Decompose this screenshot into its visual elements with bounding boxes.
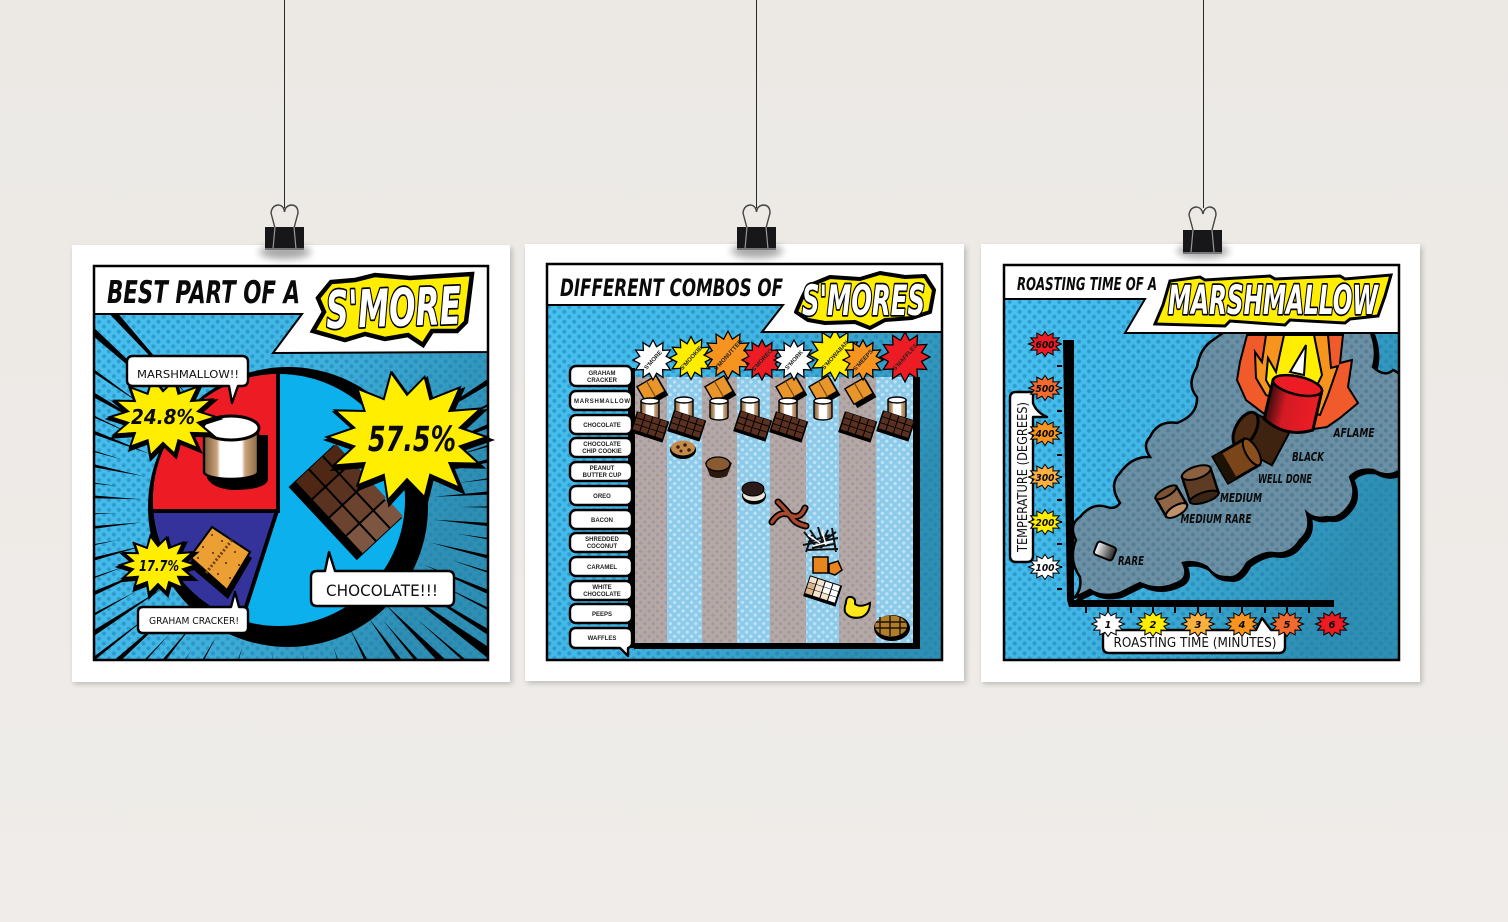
icon: peep bbox=[845, 597, 870, 618]
label: medium rare: MEDIUM RARE bbox=[1180, 511, 1252, 526]
burst: 100 bbox=[1028, 554, 1062, 580]
chocolate row bbox=[630, 410, 915, 443]
label: peeps bbox=[570, 604, 632, 623]
logo: s'more: S'MORE bbox=[325, 277, 462, 341]
marshmallow row bbox=[641, 397, 906, 420]
combo stripes bbox=[634, 377, 913, 643]
label: aflame: AFLAME bbox=[1333, 425, 1375, 440]
label: caramel bbox=[570, 557, 632, 576]
burst: s'maffles bbox=[880, 332, 930, 382]
marshmallow: medium bbox=[1180, 462, 1220, 507]
logo: s'mores: S'MORES bbox=[802, 276, 925, 325]
burst: 200 bbox=[1028, 510, 1062, 534]
bubble: marshmallow: MARSHMALLOW!! bbox=[137, 368, 239, 381]
bubble: graham cracker: GRAHAM CRACKER! bbox=[149, 616, 239, 627]
label: rare: RARE bbox=[1118, 553, 1144, 568]
burst: s'more: S'MORE bbox=[644, 350, 664, 371]
bubble: chocolate: CHOCOLATE!!! bbox=[326, 581, 438, 600]
burst: 6: 6 bbox=[1329, 620, 1336, 631]
burst: 6 bbox=[1316, 612, 1348, 636]
label: chocolate: CHOCOLATE bbox=[583, 423, 621, 429]
poster 1: best part of a s'more bbox=[71, 245, 515, 687]
label: peanut butter cup: BUTTER CUP bbox=[583, 473, 621, 479]
burst: 1: 1 bbox=[1105, 620, 1111, 631]
poster 2: different combos of s'mores bbox=[525, 244, 966, 683]
y axis caption bubble bbox=[1010, 392, 1047, 562]
label: chocolate bbox=[570, 415, 632, 434]
chocolate bar illustration bbox=[289, 443, 404, 560]
burst: 4 bbox=[1226, 612, 1258, 636]
label: white chocolate: WHITE bbox=[592, 585, 612, 591]
burst: 500: 500 bbox=[1036, 384, 1055, 395]
icon: peanut butter cup bbox=[705, 457, 732, 478]
marshmallow: aflame bbox=[1263, 371, 1324, 437]
burst: s'mowaiian: S'MOWAIIAN bbox=[821, 340, 850, 371]
label: shredded coconut bbox=[570, 533, 632, 552]
burst: 300 bbox=[1028, 464, 1062, 490]
icon: bacon bbox=[772, 502, 806, 526]
burst: s'mork bbox=[774, 340, 814, 380]
burst: 5: 5 bbox=[1284, 620, 1291, 631]
poster 1 comic panel background bbox=[94, 266, 488, 660]
burst: 24.8% bbox=[110, 377, 217, 458]
label: white chocolate: CHOCOLATE bbox=[583, 592, 621, 598]
burst: 3: 3 bbox=[1195, 620, 1202, 631]
y axis caption bubble: TEMPERATURE (DEGREES) bbox=[1016, 402, 1031, 553]
heading: roasting time of a: ROASTING TIME OF A bbox=[1017, 274, 1157, 295]
burst: 3 bbox=[1182, 612, 1214, 636]
label: bacon: BACON bbox=[591, 518, 613, 524]
x axis caption bubble bbox=[1103, 618, 1285, 653]
burst: 1 bbox=[1092, 612, 1124, 636]
icon: white chocolate bbox=[803, 575, 842, 607]
poster 2 paper bbox=[525, 244, 964, 681]
crackers row bbox=[637, 375, 876, 409]
hanging string left bbox=[284, 0, 286, 208]
chart axes bbox=[1057, 340, 1334, 613]
pie shadow ring bbox=[148, 367, 428, 647]
bubble: chocolate bbox=[311, 552, 454, 606]
icon: caramel bbox=[813, 557, 842, 575]
smoke cloud bbox=[1073, 330, 1407, 601]
y axis bursts bbox=[1028, 332, 1062, 580]
label: marshmallow bbox=[570, 391, 632, 410]
burst: 300: 300 bbox=[1036, 473, 1055, 484]
title banner 2 bbox=[547, 264, 942, 332]
marshmallow: rare bbox=[1093, 541, 1117, 561]
burst: s'mookie: S'MOOKIE bbox=[680, 346, 704, 372]
burst: s'mookie bbox=[670, 336, 712, 380]
logo: s'mores bbox=[796, 273, 934, 328]
burst: 5 bbox=[1270, 612, 1304, 636]
label: chocolate chip cookie: CHOCOLATE bbox=[583, 442, 621, 448]
burst: 600: 600 bbox=[1036, 340, 1055, 351]
title banner 3 bbox=[1004, 265, 1399, 333]
graham cracker illustration bbox=[188, 527, 252, 599]
burst: s'more bbox=[633, 340, 673, 380]
burst: s'meeps: S'MEEPS bbox=[853, 349, 875, 372]
label: black: BLACK bbox=[1292, 449, 1325, 464]
label: well done: WELL DONE bbox=[1258, 471, 1312, 486]
label: shredded coconut: COCONUT bbox=[587, 544, 617, 550]
flame bbox=[1237, 335, 1358, 430]
label: peanut butter cup bbox=[570, 462, 632, 481]
heading: best part of a: BEST PART OF A bbox=[107, 275, 300, 311]
burst: 57.5% bbox=[327, 373, 489, 503]
burst: 100: 100 bbox=[1036, 563, 1055, 574]
burst: s'monutter: S'MONUTTER bbox=[713, 339, 745, 372]
label: graham cracker: GRAHAM bbox=[588, 371, 616, 377]
label: white chocolate bbox=[570, 581, 632, 600]
poster 1 frame bbox=[94, 266, 488, 660]
label: waffles bbox=[570, 628, 632, 656]
hanging string centre bbox=[756, 0, 758, 208]
binder clip right bbox=[1177, 207, 1229, 258]
label: oreo bbox=[570, 486, 632, 505]
label: chocolate chip cookie: CHIP COOKIE bbox=[582, 449, 622, 455]
icon: waffle bbox=[874, 615, 910, 641]
burst: s'moreo bbox=[742, 340, 782, 380]
burst: 57.5%: 57.5% bbox=[368, 420, 456, 460]
ingredient labels column bbox=[570, 366, 635, 656]
marshmallow: black bbox=[1228, 408, 1290, 465]
burst: 200: 200 bbox=[1036, 518, 1055, 529]
icon: cookie bbox=[670, 440, 696, 459]
bubble: graham cracker bbox=[138, 592, 248, 633]
pie slice dividers bbox=[150, 372, 278, 610]
poster 1 paper bbox=[72, 245, 510, 682]
title banner 1 bbox=[94, 266, 488, 353]
poster 3: roasting time of a marshmallow bbox=[981, 244, 1422, 684]
burst: s'mork: S'MORK bbox=[785, 349, 805, 372]
heading: different combos of: DIFFERENT COMBOS OF bbox=[560, 274, 783, 302]
poster 3 comic panel background bbox=[1004, 265, 1399, 660]
combo bursts bbox=[633, 329, 930, 382]
logo: marshmallow bbox=[1155, 275, 1391, 326]
poster 3 frame bbox=[1004, 265, 1399, 660]
burst: 2 bbox=[1136, 612, 1170, 636]
burst: 400: 400 bbox=[1035, 429, 1055, 440]
pie chart bbox=[148, 367, 428, 650]
label: graham cracker bbox=[570, 366, 632, 386]
burst: 400 bbox=[1028, 420, 1062, 446]
burst: s'moreo: S'MOREO bbox=[751, 348, 775, 373]
burst: 2: 2 bbox=[1150, 620, 1157, 631]
burst: 17.7% bbox=[120, 536, 197, 596]
label: peeps: PEEPS bbox=[592, 612, 612, 618]
label: shredded coconut: SHREDDED bbox=[585, 537, 620, 543]
label: caramel: CARAMEL bbox=[587, 565, 617, 571]
label: chocolate chip cookie bbox=[570, 438, 632, 457]
x axis bursts bbox=[1092, 612, 1348, 636]
binder clip centre bbox=[731, 205, 783, 258]
icon: shredded coconut bbox=[803, 527, 838, 552]
label: bacon bbox=[570, 510, 632, 529]
burst: 600 bbox=[1028, 332, 1062, 356]
label: medium: MEDIUM bbox=[1220, 490, 1262, 505]
bubble: marshmallow bbox=[127, 356, 248, 403]
label: peanut butter cup: PEANUT bbox=[590, 466, 615, 472]
burst: s'meeps bbox=[843, 340, 883, 380]
chart frame shadow bbox=[634, 377, 920, 649]
burst: 24.8%: 24.8% bbox=[131, 405, 195, 429]
x axis caption bubble: ROASTING TIME (MINUTES) bbox=[1114, 636, 1276, 651]
label: marshmallow: MARSHMALLOW bbox=[574, 399, 630, 405]
pie slices bbox=[153, 374, 405, 626]
burst: s'monutter bbox=[704, 331, 752, 379]
burst: s'maffles: S'MAFFLES bbox=[892, 343, 919, 372]
hanging string right bbox=[1202, 0, 1204, 208]
logo: s'more bbox=[313, 274, 472, 345]
marshmallow: medium rare bbox=[1154, 483, 1189, 521]
icon: oreo bbox=[742, 482, 766, 504]
poster 2 comic panel background bbox=[547, 264, 942, 660]
poster 3 paper bbox=[981, 244, 1420, 682]
label: graham cracker: CRACKER bbox=[587, 378, 618, 384]
label: oreo: OREO bbox=[593, 494, 611, 500]
burst: 500 bbox=[1028, 376, 1062, 400]
speed lines bbox=[95, 315, 487, 659]
burst: s'mowaiian bbox=[809, 329, 861, 381]
marshmallow illustration bbox=[203, 416, 268, 490]
marshmallow: well done bbox=[1213, 436, 1265, 483]
burst: 17.7%: 17.7% bbox=[139, 557, 179, 575]
poster 2 frame bbox=[547, 264, 942, 660]
burst: 4: 4 bbox=[1238, 620, 1246, 631]
label: waffles: WAFFLES bbox=[588, 636, 616, 642]
binder clip left bbox=[259, 205, 311, 259]
